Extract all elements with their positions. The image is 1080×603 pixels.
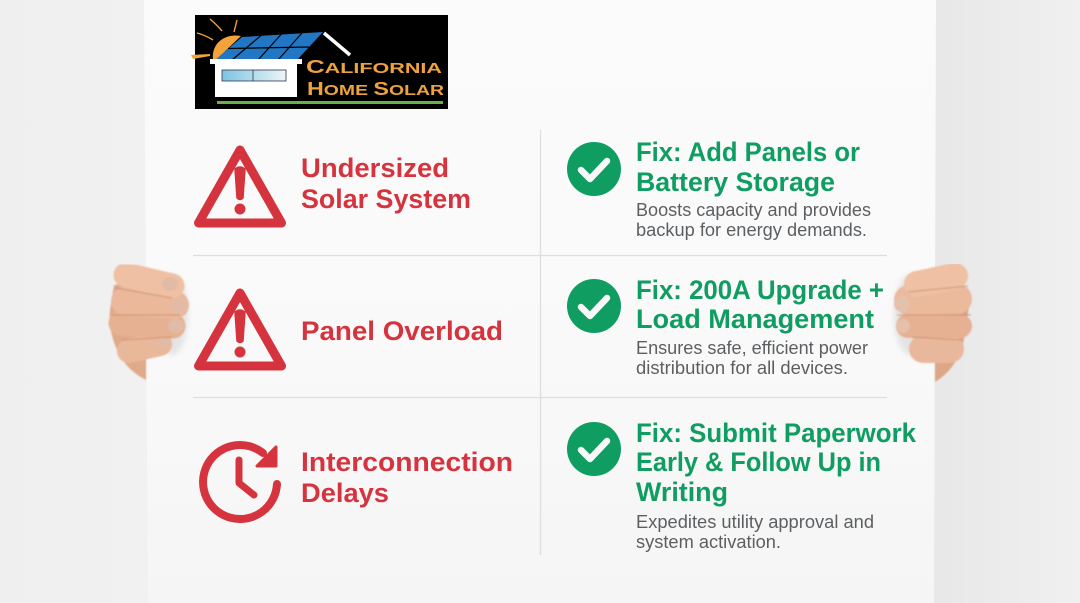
white board <box>144 0 936 603</box>
problem heading: Delays <box>301 478 389 508</box>
row 1: fix <box>567 137 871 240</box>
fix heading: Load Management <box>636 304 874 334</box>
problem heading: Undersized <box>301 153 449 183</box>
left hand <box>110 275 188 380</box>
fix description: backup for energy demands. <box>636 220 867 240</box>
problem heading: Solar System <box>301 184 471 214</box>
problem heading: Interconnection <box>301 447 513 477</box>
fix description: Expedites utility approval and <box>636 512 874 532</box>
logo: California Home Solar: C ALIFORNIA <box>306 57 442 77</box>
fix heading: Writing <box>636 477 728 507</box>
row 1: undersized solar system problem <box>198 150 471 223</box>
icon: clock with arrow <box>203 445 277 519</box>
fix heading: Early & Follow Up in <box>636 447 881 477</box>
fix description: distribution for all devices. <box>636 358 848 378</box>
icon: check <box>567 422 621 476</box>
row 3: fix <box>567 418 917 552</box>
row 2: fix <box>567 275 884 378</box>
logo: California Home Solar: H OME SOLAR <box>307 79 444 99</box>
fix heading: Fix: Add Panels or <box>636 137 860 167</box>
logo: California Home Solar <box>191 15 448 109</box>
row 2: panel overload problem <box>198 293 503 366</box>
fix heading: Fix: 200A Upgrade + <box>636 275 884 305</box>
icon: check <box>567 279 621 333</box>
right hand <box>894 275 971 382</box>
problem heading: Panel Overload <box>301 316 503 346</box>
icon: warning triangle <box>198 150 282 223</box>
fix description: Ensures safe, efficient power <box>636 338 868 358</box>
icon: warning triangle <box>198 293 282 366</box>
fix description: Boosts capacity and provides <box>636 200 871 220</box>
row 3: interconnection delays problem <box>203 445 513 519</box>
fix heading: Battery Storage <box>636 167 835 197</box>
fix description: system activation. <box>636 532 781 552</box>
icon: check <box>567 142 621 196</box>
divider lines <box>193 130 887 555</box>
fix heading: Fix: Submit Paperwork <box>636 418 917 448</box>
